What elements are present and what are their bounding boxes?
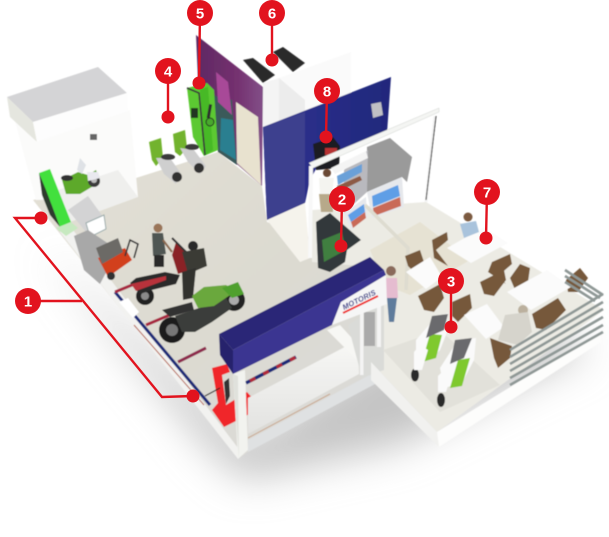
- seated woman: [460, 212, 479, 238]
- callout 6: 6: [268, 6, 276, 22]
- callout 4: 4: [164, 64, 173, 80]
- purple branded wall: [196, 35, 263, 186]
- seated man: [498, 305, 532, 345]
- shop fridges: [344, 138, 412, 230]
- main floor: [33, 152, 385, 459]
- red barrier gate: [205, 357, 296, 427]
- floor step by wall: [267, 203, 310, 262]
- black vending unit: [313, 137, 340, 170]
- scooters by charger: [149, 130, 206, 184]
- terrace platform: [371, 330, 601, 447]
- callout 5: 5: [196, 6, 204, 22]
- rider: [182, 241, 207, 300]
- brand sign: MOTORIS: [341, 288, 377, 312]
- green charging station: [187, 83, 218, 156]
- callout 8: 8: [323, 84, 331, 100]
- ground shadow: [45, 250, 590, 480]
- white column: [233, 370, 248, 459]
- green kiosk: [39, 169, 78, 236]
- navy fascia: [219, 257, 386, 374]
- counter: [68, 196, 118, 284]
- store shelf: [331, 151, 368, 192]
- green motorcycle: [159, 282, 245, 343]
- glass frame: [309, 108, 439, 290]
- green scooters on terrace: [411, 313, 476, 407]
- callout 7: 7: [483, 184, 491, 202]
- red motorcycle: [130, 238, 196, 305]
- cafe floor: [312, 202, 604, 432]
- callout 2: 2: [338, 192, 346, 208]
- motorcycle in showroom: [316, 213, 361, 272]
- standing man: [152, 224, 172, 267]
- callout 3: 3: [447, 274, 455, 290]
- scooter in booth: [61, 158, 100, 194]
- callout 3: [438, 268, 464, 334]
- white service booth: [7, 67, 138, 222]
- white wall with racks: [243, 47, 351, 127]
- navy back wall: [263, 77, 391, 220]
- callout 6: [259, 0, 285, 66]
- parking bay with lines: [115, 285, 210, 405]
- callout 2: [329, 186, 355, 252]
- pink customer: [385, 266, 398, 322]
- cafe chairs: [405, 232, 588, 368]
- callout 5: [187, 0, 213, 90]
- cafe tables: [406, 227, 571, 339]
- callout 8: [314, 78, 340, 144]
- callout 4: [155, 58, 181, 124]
- callout 7: [474, 179, 500, 244]
- brand sign: [332, 275, 387, 325]
- staff member: [319, 169, 334, 212]
- callout 1: [15, 212, 200, 402]
- glass shopfront: [248, 302, 384, 434]
- illustration: dealership model: [7, 35, 604, 459]
- terrace railing: [510, 270, 603, 385]
- red compressor: [96, 238, 138, 280]
- callout 1: 1: [24, 294, 32, 310]
